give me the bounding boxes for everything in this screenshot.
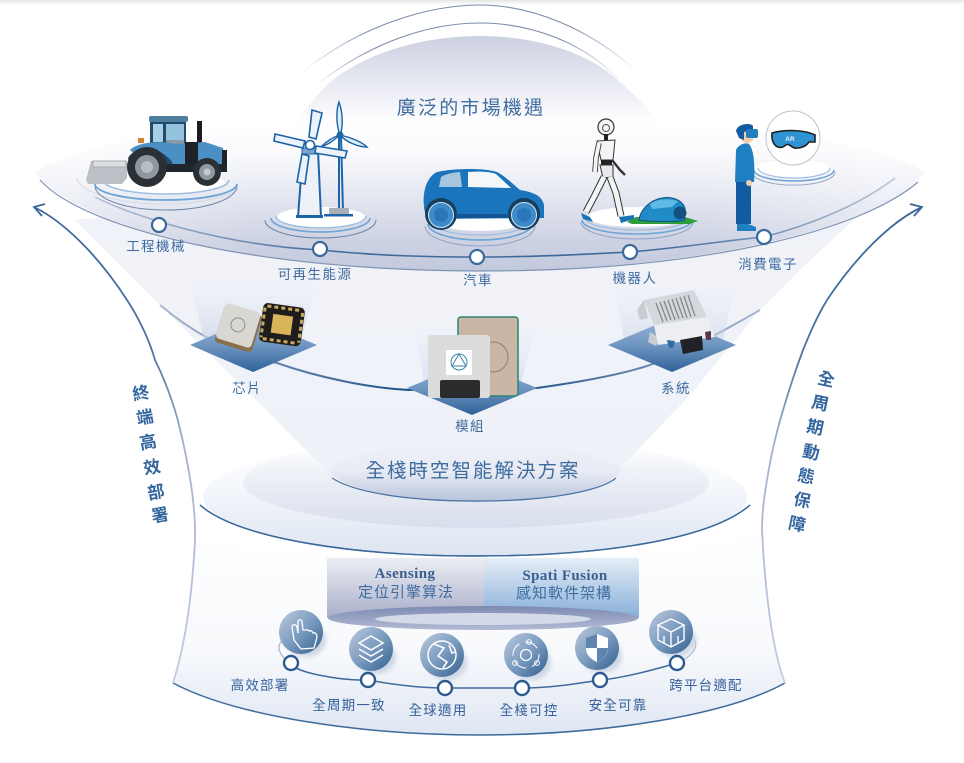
icon: touch xyxy=(279,610,326,657)
label: car: 汽車 xyxy=(463,273,493,288)
side label: assurance: 態 xyxy=(796,466,816,488)
cylinder base xyxy=(328,606,638,630)
icon: chip silver xyxy=(214,302,263,353)
icon: shield xyxy=(575,626,622,673)
icon: wind turbines xyxy=(274,102,367,218)
side label: assurance: 周 xyxy=(810,393,830,415)
subtitle: 定位引擎算法 xyxy=(358,584,454,601)
diamond xyxy=(407,361,537,415)
device front xyxy=(654,317,715,345)
label: consumer: 消費電子 xyxy=(738,257,798,272)
heading: solution: 全棧時空智能解決方案 xyxy=(365,460,581,482)
group: module xyxy=(407,317,537,415)
node: security xyxy=(593,673,607,687)
disc inner xyxy=(243,436,709,528)
heading: market: 廣泛的市場機遇 xyxy=(397,97,545,119)
node: machinery xyxy=(152,218,166,232)
device plug maroon xyxy=(705,331,711,340)
side label: assurance xyxy=(787,369,836,536)
arrow: right xyxy=(762,204,922,683)
diamond xyxy=(190,318,317,372)
icon: car xyxy=(424,169,544,230)
callout: AR goggles: AR xyxy=(785,136,795,143)
label: chip: 芯片 xyxy=(232,381,262,396)
icon: layers xyxy=(349,627,396,674)
base body xyxy=(173,530,785,735)
funnel background xyxy=(75,180,870,474)
side label: deployment: 端 xyxy=(135,407,155,428)
bowl line over base xyxy=(200,505,750,556)
side label: deployment: 部 xyxy=(146,481,166,503)
logo mark xyxy=(451,354,467,370)
platform: consumer xyxy=(752,160,835,185)
icon: chip gold xyxy=(258,302,305,347)
subtitle: 感知軟件架構 xyxy=(516,584,612,602)
lens body xyxy=(35,122,925,271)
icon: tractor xyxy=(86,116,227,187)
label: fullstack: 全棧可控 xyxy=(500,703,558,718)
node: fullstack xyxy=(515,681,529,695)
label: global: 全球適用 xyxy=(409,702,467,718)
node: cross platform xyxy=(670,656,684,670)
side label: assurance: 動 xyxy=(801,442,821,464)
label: lifecycle: 全周期一致 xyxy=(312,698,386,713)
core outline xyxy=(332,478,616,501)
market lens panel xyxy=(35,5,925,271)
node: global xyxy=(438,681,452,695)
node: robot xyxy=(623,245,637,259)
connector xyxy=(440,380,480,398)
dome shape xyxy=(296,36,660,124)
panel: platform base xyxy=(173,505,785,735)
side label: assurance: 保 xyxy=(792,490,812,512)
node: car xyxy=(470,250,484,264)
icon: orbit xyxy=(504,633,551,680)
device ears xyxy=(637,300,660,346)
device top xyxy=(644,290,707,325)
feature track xyxy=(291,663,677,688)
label: security: 安全可靠 xyxy=(589,698,647,713)
side label: assurance: 障 xyxy=(787,513,808,536)
panel: Spati Fusion card xyxy=(484,558,639,618)
side label: deployment: 署 xyxy=(150,505,170,526)
label: system: 系統 xyxy=(661,381,691,396)
logo tile xyxy=(446,350,472,375)
base outline xyxy=(173,683,785,735)
title: Spati Fusion xyxy=(522,568,608,584)
side label: deployment: 終 xyxy=(131,382,151,404)
tan module xyxy=(458,317,518,396)
title: Asensing xyxy=(375,566,435,582)
beam xyxy=(415,325,535,388)
label: cross platform: 跨平台適配 xyxy=(669,677,743,693)
beam xyxy=(190,280,317,345)
arrow: left xyxy=(34,204,195,683)
icon: cube xyxy=(649,610,696,657)
platform: robot xyxy=(581,207,693,239)
group: chips xyxy=(190,280,317,372)
node: deploy xyxy=(284,656,298,670)
side label: assurance: 全 xyxy=(816,369,836,391)
label: renewable: 可再生能源 xyxy=(278,267,352,282)
platform: wind xyxy=(265,207,376,238)
device fins xyxy=(656,295,695,322)
callout: AR goggles xyxy=(766,111,820,165)
panel: solution disc xyxy=(203,436,747,556)
node: lifecycle xyxy=(361,673,375,687)
platform: tractor xyxy=(76,172,238,210)
device connector xyxy=(680,336,703,354)
bowl line xyxy=(200,505,750,556)
platform: car xyxy=(425,209,535,246)
node: renewable xyxy=(313,242,327,256)
label: robot: 機器人 xyxy=(613,271,657,286)
node: consumer xyxy=(757,230,771,244)
panel: Asensing card xyxy=(327,558,484,618)
beam xyxy=(615,285,735,345)
tan module mark xyxy=(478,342,508,372)
icon: person with headset xyxy=(735,124,758,231)
label: module: 模組 xyxy=(455,419,485,434)
label: machinery: 工程機械 xyxy=(126,239,186,254)
solution core ellipse xyxy=(328,442,622,502)
label: deploy: 高效部署 xyxy=(231,677,289,693)
silver module xyxy=(428,335,490,398)
chip tier curve xyxy=(160,305,760,390)
disc outer xyxy=(203,438,747,556)
track ends xyxy=(279,636,696,664)
device plugs xyxy=(667,340,675,348)
side label: deployment xyxy=(131,382,170,526)
side label: assurance: 期 xyxy=(805,417,825,439)
lens outline xyxy=(40,180,918,271)
group: system xyxy=(608,285,736,372)
icon: robot and mower xyxy=(581,119,698,224)
node track xyxy=(95,178,895,257)
side label: deployment: 效 xyxy=(142,457,162,478)
side label: deployment: 高 xyxy=(138,431,158,453)
diamond xyxy=(608,318,736,372)
dome arcs xyxy=(303,5,637,86)
icon: globe xyxy=(420,633,467,680)
lens edge fade xyxy=(35,122,925,271)
top edge strip xyxy=(0,0,964,5)
